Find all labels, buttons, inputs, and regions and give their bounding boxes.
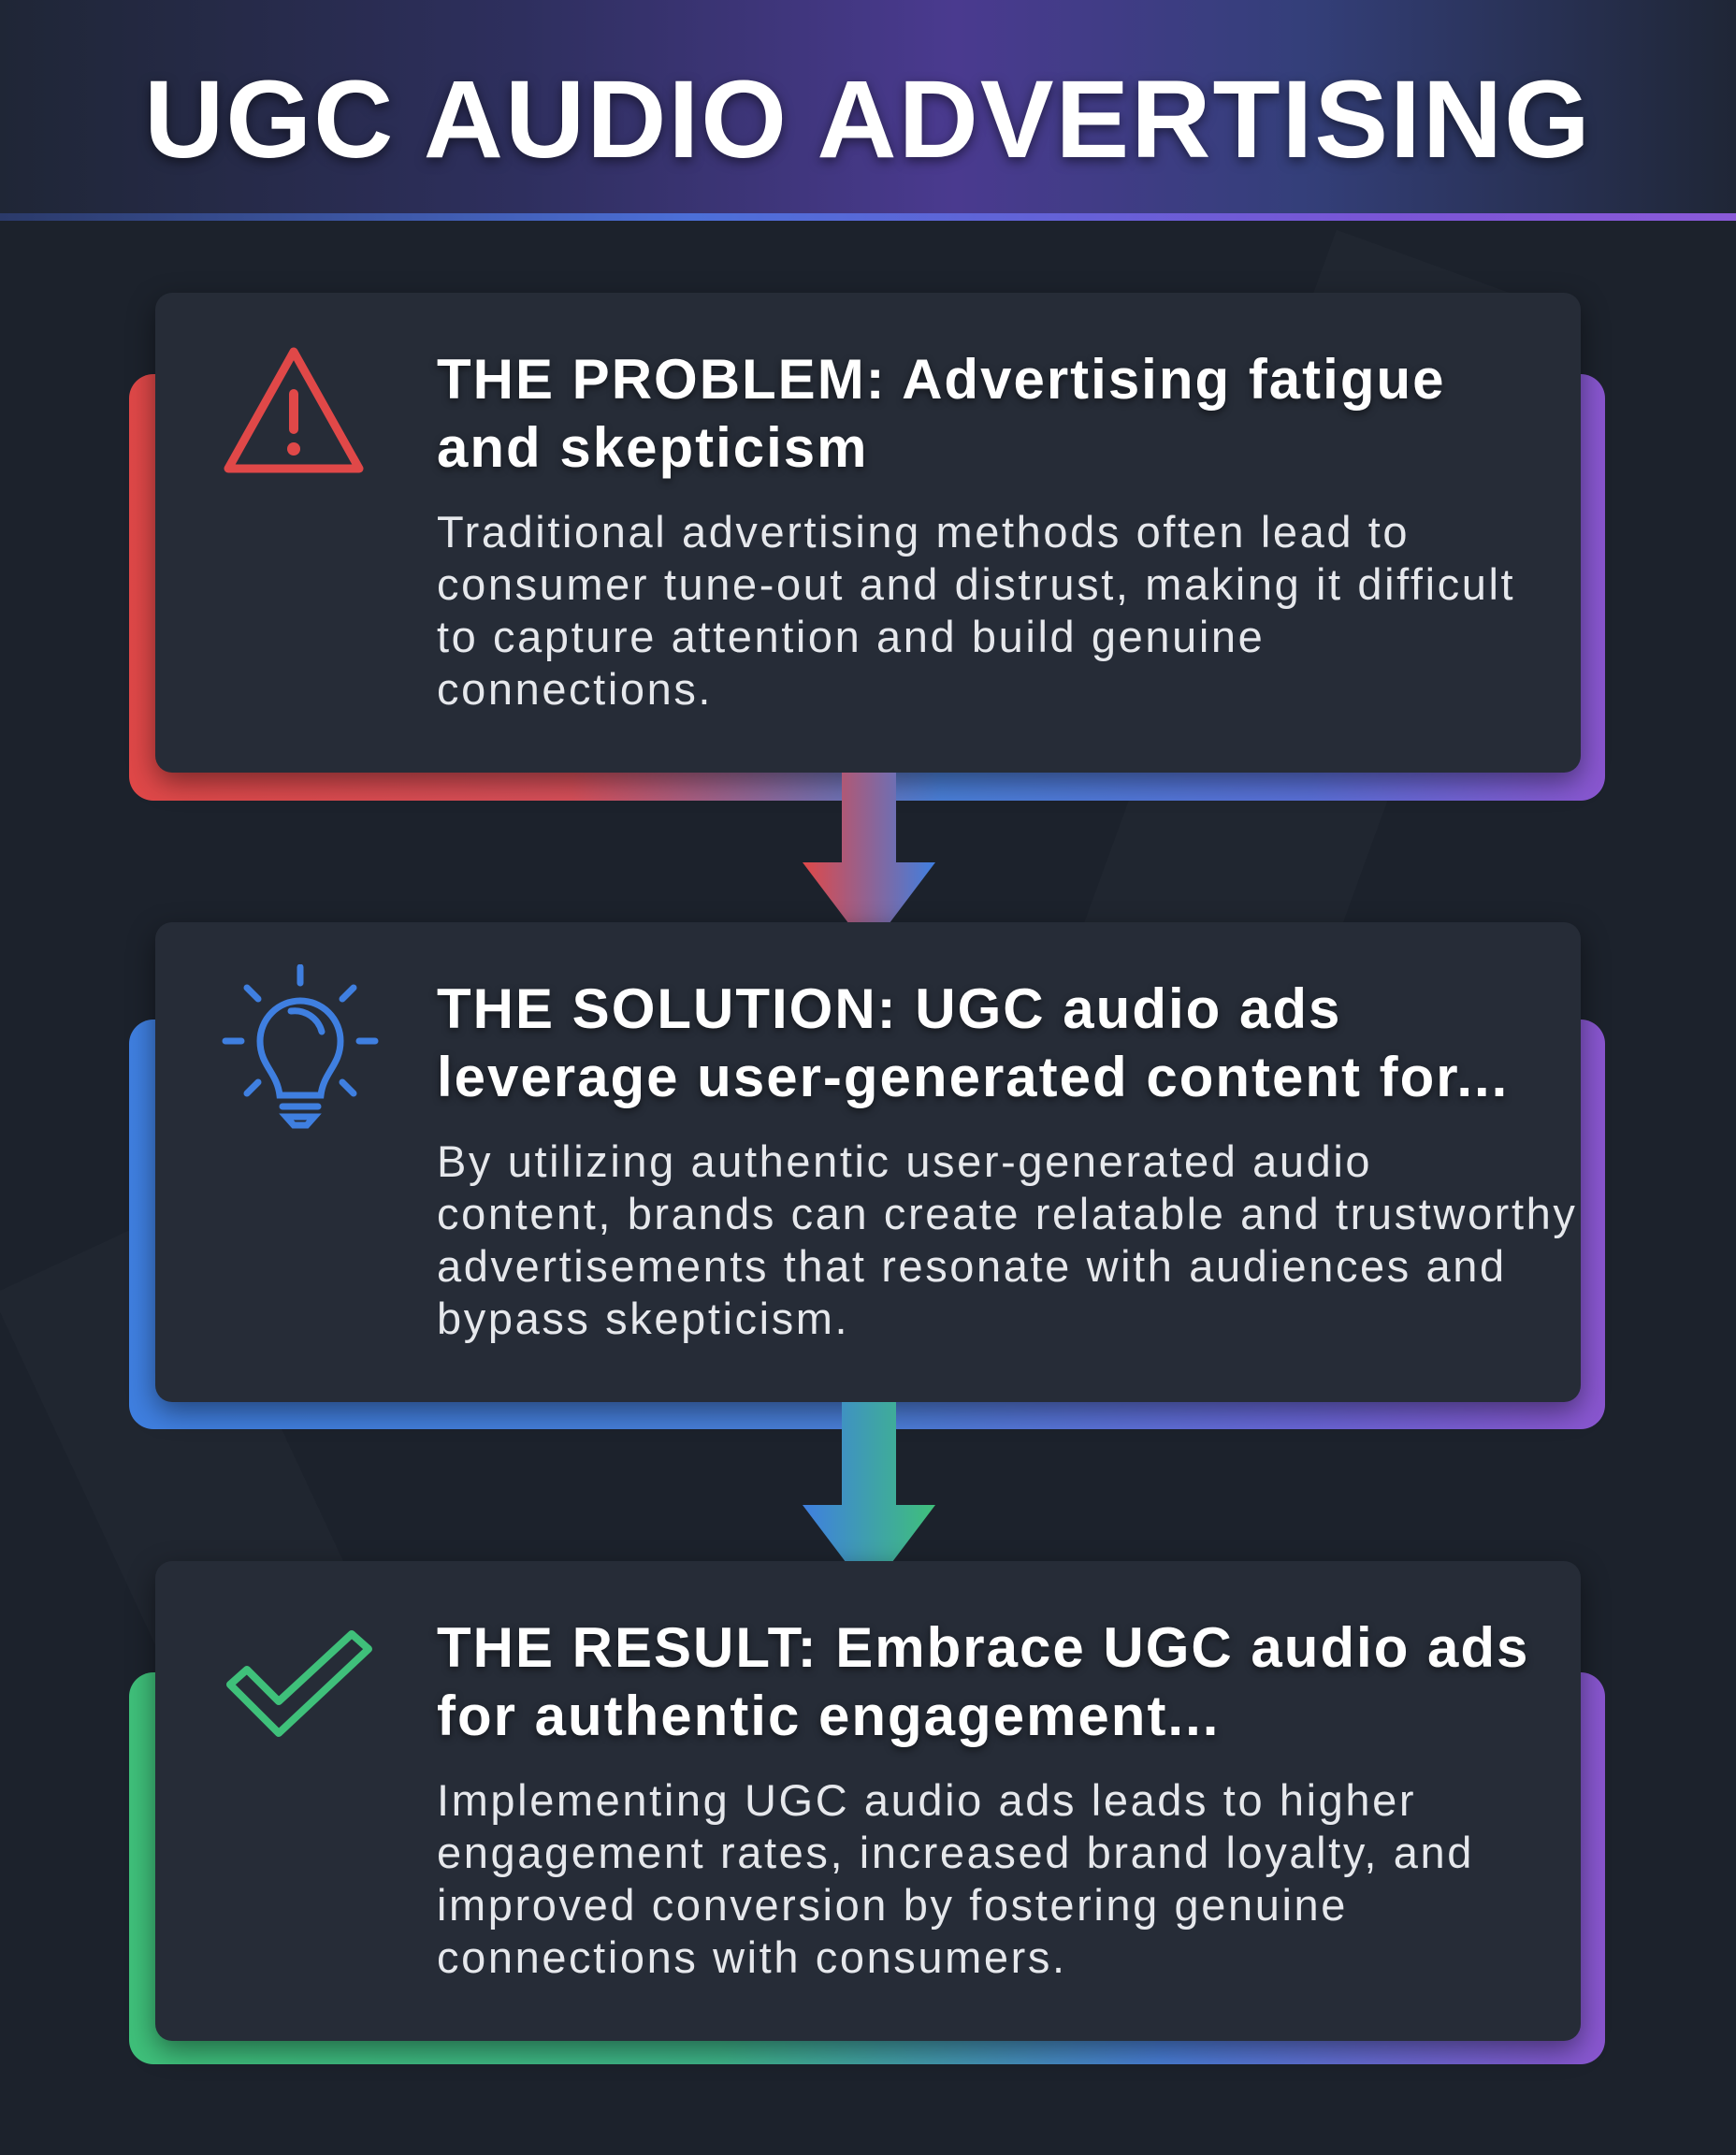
heading: result: THE RESULT: Embrace UGC audio ads xyxy=(437,1616,1529,1679)
text: problem: connections. xyxy=(437,664,713,714)
heading: solution: leverage user-generated content for... xyxy=(437,1046,1509,1108)
text: problem: to capture attention and build genuine xyxy=(437,612,1265,661)
panel: solution xyxy=(155,922,1581,1402)
heading: result: for authentic engagement... xyxy=(437,1685,1220,1747)
heading: problem: THE PROBLEM: Advertising fatigue xyxy=(437,348,1446,411)
panel: problem backing border xyxy=(129,374,1605,801)
text: result: Implementing UGC audio ads leads to higher xyxy=(437,1775,1416,1825)
text: result: connections with consumers. xyxy=(437,1932,1067,1982)
text: solution: content, brands can create relatable and trustworthy xyxy=(437,1189,1577,1238)
icon: light bulb xyxy=(223,964,378,1128)
title: UGC AUDIO ADVERTISING xyxy=(144,58,1592,181)
arrow: solution to result xyxy=(803,1402,935,1561)
heading: result xyxy=(437,1616,1529,1751)
heading: problem: and skepticism xyxy=(437,416,869,479)
panel: result backing border xyxy=(129,1672,1605,2064)
text: solution: By utilizing authentic user-generated audio xyxy=(437,1136,1372,1186)
heading: problem xyxy=(437,348,1446,483)
text: solution: advertisements that resonate with audiences and xyxy=(437,1241,1507,1291)
heading: solution xyxy=(437,977,1509,1113)
panel: result xyxy=(155,1561,1581,2041)
icon: check mark xyxy=(226,1630,372,1737)
arrow: problem to solution xyxy=(803,773,935,922)
text: result: improved conversion by fostering genuine xyxy=(437,1880,1348,1930)
text: problem: consumer tune-out and distrust, making it difficult xyxy=(437,559,1515,609)
text: solution xyxy=(437,1136,1577,1343)
text: problem xyxy=(437,507,1515,714)
header xyxy=(0,0,1736,217)
heading: solution: THE SOLUTION: UGC audio ads xyxy=(437,977,1341,1040)
panel: problem xyxy=(155,293,1581,773)
icon: warning triangle xyxy=(224,348,363,473)
panel: solution backing border xyxy=(129,1020,1605,1429)
text: solution: bypass skepticism. xyxy=(437,1294,849,1343)
text: problem: Traditional advertising methods often lead to xyxy=(437,507,1410,557)
text: result: engagement rates, increased brand loyalty, and xyxy=(437,1828,1474,1877)
text: result xyxy=(437,1775,1474,1982)
